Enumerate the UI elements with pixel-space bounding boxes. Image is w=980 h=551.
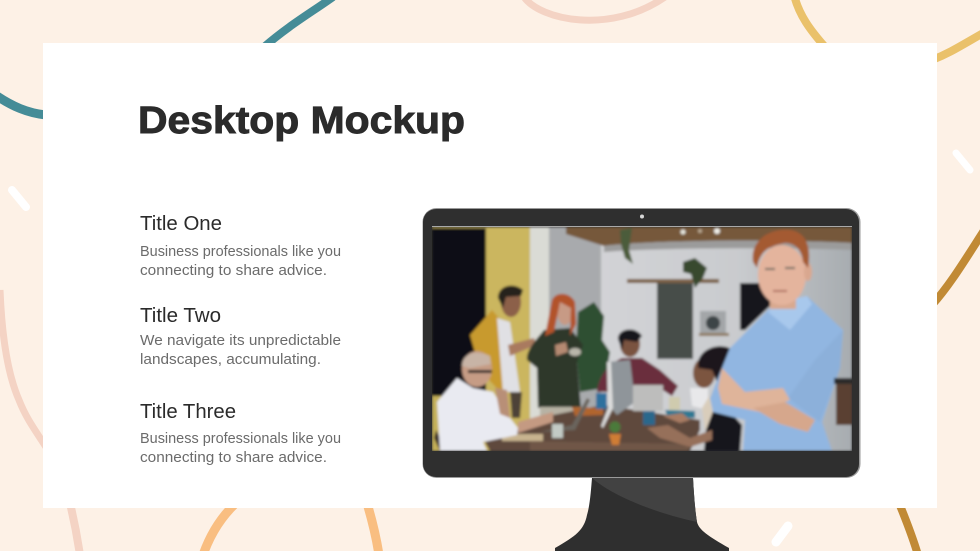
text block: title three [140,401,341,466]
sofa on the right [834,378,852,384]
text block: title three: connecting to share advice. [140,449,327,466]
title: Desktop Mockup [138,100,465,142]
laptop, tablet and tray [572,407,603,416]
table [485,405,700,451]
cups, glass, book and small plant [596,393,607,409]
text block: title one [140,213,341,279]
text block: title two: landscapes, accumulating. [140,351,321,368]
text block: title one: connecting to share advice. [140,262,327,279]
shelf, window, door and picture [627,279,719,283]
text block: title one: Title One [140,213,222,235]
text block: title three: Business professionals like you [140,430,341,447]
man with arms crossed: arms [718,368,790,412]
man with arms crossed: shirt [710,296,843,451]
text block: title three: Title Three [140,401,236,423]
standing man in yellow jacket [468,310,503,390]
text block: title two: We navigate its unpredictable [140,332,341,349]
team photo on screen [432,227,852,451]
background plant [576,302,610,392]
text block: title two [140,305,341,368]
man with arms crossed: head [768,298,798,310]
bald man in white [437,378,518,451]
desktop monitor mockup [422,208,860,551]
white content panel [43,43,937,508]
walls [432,227,852,451]
monitor stand [555,478,729,551]
monitor body [422,208,860,478]
ceiling lights [680,230,686,234]
text block: title one: Business professionals like you [140,243,341,260]
man with maroon sweater [597,358,678,396]
standing woman in green [527,328,583,408]
woman at table [690,388,708,410]
bottom-left yellow wall and chair [432,396,442,451]
text block: title two: Title Two [140,305,221,327]
